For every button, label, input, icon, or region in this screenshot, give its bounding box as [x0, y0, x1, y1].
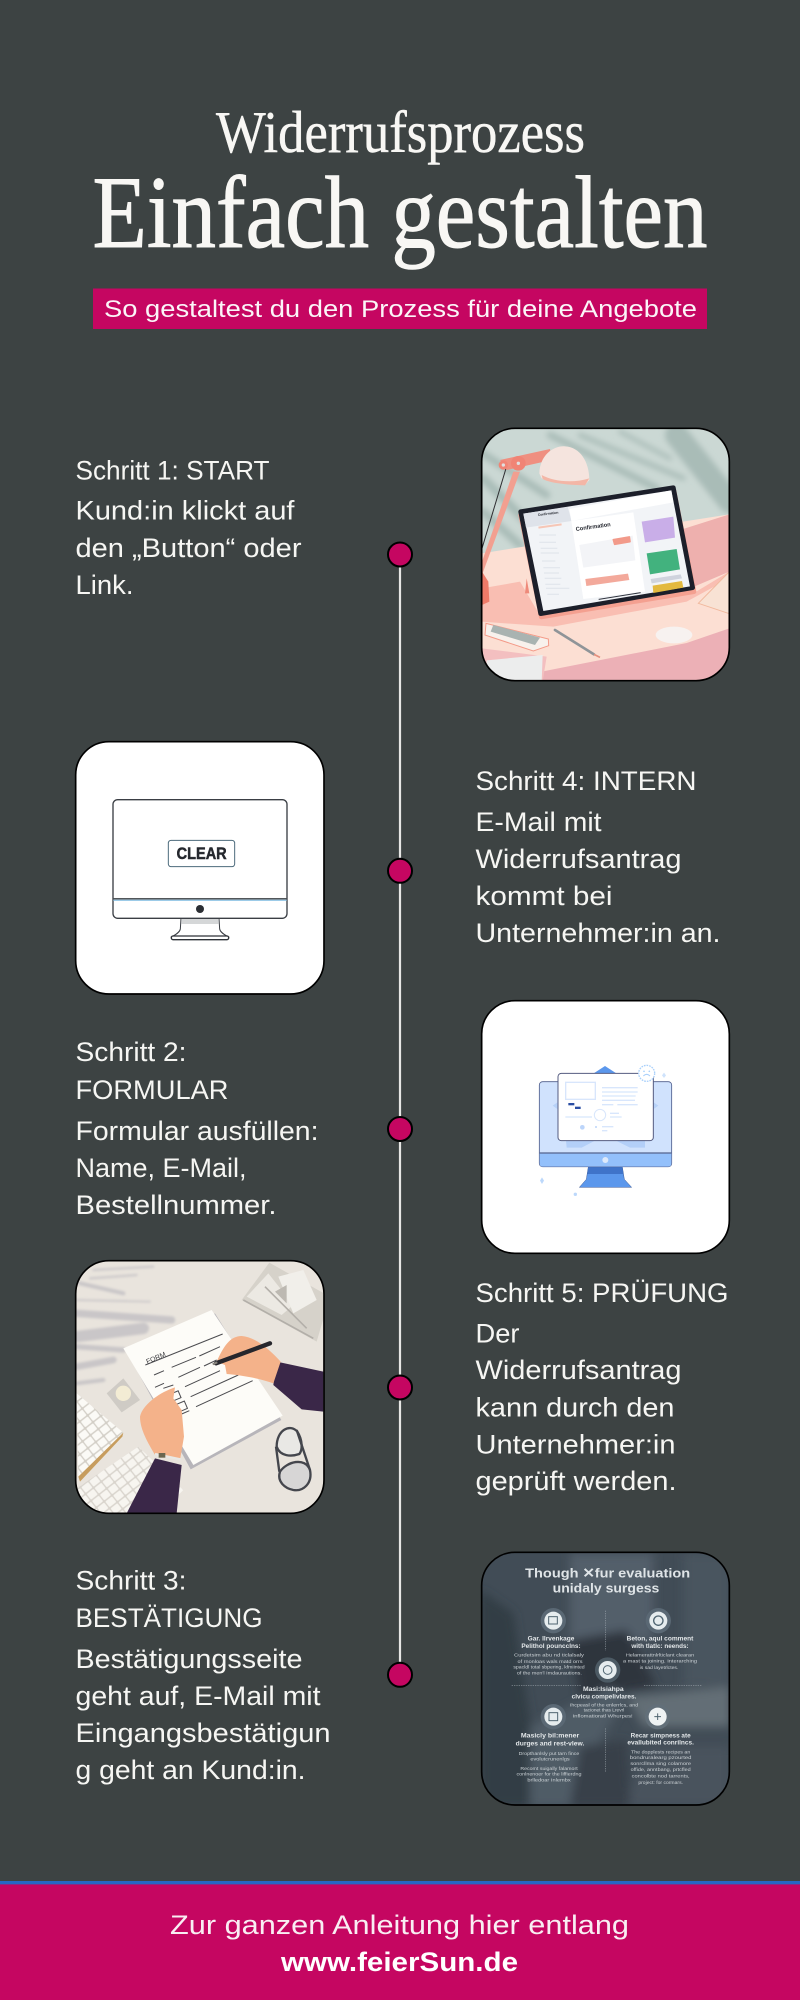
slide text blocks: Beton, aqul comment	[627, 1636, 694, 1643]
right hand with pen	[213, 1336, 323, 1412]
monitor illustration	[539, 1065, 672, 1196]
slide text blocks: Pelithol pouncclns:	[521, 1643, 581, 1650]
subtitle banner	[93, 288, 707, 329]
step 2 text: FORMULAR	[76, 1075, 228, 1105]
step 1 text	[76, 456, 302, 600]
title	[92, 99, 708, 270]
paper	[127, 1313, 281, 1469]
desk objects	[485, 623, 549, 651]
slide text blocks: evolutcrunenlgs	[530, 1757, 570, 1763]
left hand	[127, 1387, 184, 1513]
slide text blocks: offide, anntbang, prtcfled	[631, 1767, 691, 1773]
image: hands filling out a form: FORM	[145, 1351, 167, 1366]
tablet: Confirmation	[575, 522, 612, 533]
slide text blocks: spacldl total sbpering, kfmiinted	[513, 1665, 585, 1671]
step 3 text	[76, 1566, 330, 1785]
desk	[482, 514, 729, 682]
step 3 text: Schritt 3:	[76, 1566, 186, 1596]
step 2 text: Bestellnummer.	[76, 1190, 276, 1220]
monitor icon	[113, 800, 287, 940]
step 5 text	[476, 1278, 728, 1496]
step 5 text: Widerrufsantrag	[476, 1355, 682, 1385]
step 2 text: Name, E-Mail,	[76, 1153, 246, 1183]
step 5 text: Schritt 5: PRÜFUNG	[476, 1278, 728, 1308]
glasses	[276, 1428, 310, 1490]
books top right	[242, 1263, 324, 1342]
step 3 text: Bestätigungsseite	[76, 1644, 302, 1674]
slide text blocks: Recar simpness ate	[631, 1732, 691, 1739]
slide text blocks: Inflomatioratl Whurpes!	[573, 1714, 633, 1720]
slide heading	[525, 1568, 690, 1595]
step 4 text: kommt bei	[476, 881, 612, 911]
step 5 text: Unternehmer:in	[476, 1430, 676, 1460]
slide text blocks: Recomt suigally falamort	[520, 1766, 578, 1772]
monitor icon: CLEAR	[177, 844, 227, 863]
step 4 text: Schritt 4: INTERN	[476, 766, 696, 796]
step 5 text: Der	[476, 1318, 520, 1348]
step 3 text: Eingangsbestätigun	[76, 1718, 330, 1748]
timeline	[388, 542, 412, 1687]
image: blue monitor with form window	[482, 1001, 729, 1253]
footer: Zur ganzen Anleitung hier entlang	[170, 1910, 629, 1940]
step 1 text: Link.	[76, 570, 134, 600]
slide text blocks: Curdetsim abu nd ticlalsaly	[514, 1653, 585, 1659]
slide text blocks: conlnenoer for the liffierdng	[516, 1772, 582, 1778]
palm shadow	[77, 1267, 172, 1383]
slide heading: Though ✕fur evaluation	[525, 1565, 690, 1580]
slide heading: unidaly surgess	[553, 1581, 659, 1596]
slide text blocks: sonrcllma sing colamore	[630, 1761, 691, 1767]
slide text blocks: Masicly bil:mener	[521, 1733, 580, 1740]
step 3 text: geht auf, E-Mail mit	[76, 1681, 321, 1711]
image: dark evaluation slide	[480, 1552, 730, 1807]
slide text blocks: brlledoar Inlembx	[527, 1778, 571, 1784]
slide text blocks: bondruralearg pzourted	[630, 1755, 692, 1761]
step 2 text: Schritt 2:	[76, 1037, 186, 1067]
slide text blocks: durges and rest-vlew.	[516, 1741, 585, 1748]
step 1 text: den „Button“ oder	[76, 533, 302, 563]
footer: www.feierSun.de	[280, 1947, 518, 1977]
image: tablet on desk with confirmation page	[480, 428, 730, 682]
step 1 text: Kund:in klickt auf	[76, 496, 295, 526]
slide text blocks: is sad layetrlctes.	[640, 1665, 678, 1671]
tablet	[521, 488, 694, 617]
step 2 text	[76, 1037, 318, 1220]
dividers and icons	[512, 1608, 702, 1772]
slide text blocks: of rnonloas wals matd orrs	[517, 1659, 583, 1665]
blurred photo background	[480, 1553, 730, 1807]
slide text blocks: The dopplests recipes an	[631, 1749, 691, 1755]
title: Einfach gestalten	[92, 156, 708, 270]
keyboards	[77, 1393, 123, 1477]
slide text blocks: Helamerattnlrlticlant clearan	[626, 1653, 694, 1659]
step 3 text: g geht an Kund:in.	[76, 1755, 306, 1785]
step 3 text: BESTÄTIGUNG	[76, 1603, 262, 1633]
slide text blocks: Gar. Ilrvenkage	[528, 1636, 575, 1643]
lamp	[482, 446, 589, 605]
slide text blocks	[513, 1636, 697, 1786]
slide text blocks: project: for cormars.	[638, 1780, 683, 1786]
step 5 text: geprüft werden.	[476, 1466, 676, 1496]
slide text blocks: a mast ta joining. Interarching	[623, 1658, 697, 1664]
footer	[0, 1881, 800, 2000]
image: monitor with CLEAR button	[76, 742, 324, 994]
tablet: Confirmation	[538, 510, 559, 517]
step 4 text: E-Mail mit	[476, 807, 602, 837]
step 2 text: Formular ausfüllen:	[76, 1116, 318, 1146]
step 1 text: Schritt 1: START	[76, 456, 270, 486]
slide text blocks: evallubited conrilncs.	[627, 1740, 694, 1747]
cube	[107, 1378, 140, 1412]
image: hands filling out a form	[76, 1261, 324, 1513]
step 4 text	[476, 766, 720, 948]
title: Widerrufsprozess	[216, 99, 585, 165]
subtitle banner: So gestaltest du den Prozess für deine Angebote	[104, 296, 697, 323]
slide text blocks: Masi:Isiahpa	[583, 1686, 624, 1693]
slide text blocks: Dropthanlsly put tarn fince	[519, 1751, 580, 1757]
slide text blocks: of the men'l Imdaurautions.	[517, 1671, 582, 1677]
step 4 text: Widerrufsantrag	[476, 844, 682, 874]
step 4 text: Unternehmer:in an.	[476, 918, 720, 948]
slide text blocks: clvicu compelivlares.	[572, 1694, 637, 1701]
slide text blocks: tacionet thas Lrevrl	[584, 1708, 624, 1714]
slide text blocks: Ihcpeasl of the enlerrlcs, and	[570, 1703, 638, 1709]
step 5 text: kann durch den	[476, 1392, 674, 1422]
slide text blocks: concolbte nod tarrents,	[632, 1773, 690, 1779]
slide text blocks: with tlatlc: neends:	[630, 1643, 689, 1650]
